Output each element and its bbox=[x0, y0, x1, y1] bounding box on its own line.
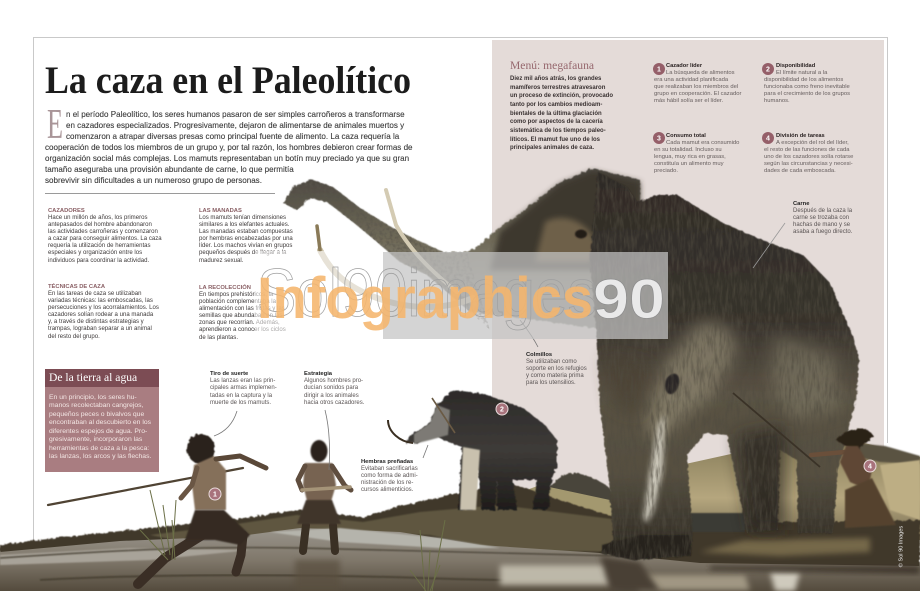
text: La recolección: de las plantas. bbox=[199, 335, 238, 341]
intro text: organización social más complejas. Los mamuts representaban un botín muy preciado ya que su gran bbox=[45, 154, 409, 162]
number markers: 2 bbox=[766, 66, 770, 74]
text: Cazadores: individuos para coordinar la actividad. bbox=[48, 258, 149, 264]
callout: Carne: carne se trozaba con bbox=[793, 215, 849, 221]
small mammoth bbox=[388, 390, 557, 510]
callout: Hembras preñadas: Hembras preñadas bbox=[361, 458, 413, 464]
item 1: Cazador líder: era una actividad planificada bbox=[654, 77, 728, 83]
hunter 1 bbox=[48, 434, 266, 584]
intro text: sobrevivir sin dificultades a un numeroso grupo de personas. bbox=[45, 176, 262, 184]
callout: Estrategia: Algunos hombres pro- bbox=[304, 378, 363, 384]
body text: encontraban al descubierto en los bbox=[49, 419, 151, 426]
callout: Tiro de suerte: tadas en la captura y la bbox=[210, 393, 272, 399]
text: Técnicas de caza: trampas, lograban separar a un animal bbox=[48, 326, 152, 332]
text: Técnicas de caza: persecuciones y los acorralamientos. Los bbox=[48, 305, 159, 311]
callout: Hembras preñadas bbox=[361, 458, 418, 493]
head shading bbox=[490, 171, 640, 270]
item 3: Consumo total: Consumo total bbox=[666, 132, 706, 138]
item 4: División de tareas: A excepción del rol del líder, bbox=[776, 140, 849, 146]
callout: Hembras preñadas: como forma de admi- bbox=[361, 473, 418, 479]
item 3: Consumo total: lengua, muy rica en grasas, bbox=[654, 154, 726, 160]
item 2: Disponibilidad: funcionaba como freno inevitable bbox=[764, 84, 850, 90]
callout: Tiro de suerte: Las lanzas eran las prin- bbox=[210, 378, 275, 384]
callout: Carne: Carne bbox=[793, 200, 809, 206]
credit: © Sol 90 Images bbox=[898, 526, 904, 567]
callout: Colmillos: soporte en los refugios bbox=[526, 366, 587, 372]
item 3: Consumo total: Cada mamut era consumido bbox=[666, 140, 739, 146]
text: La recolección: semillas que abundaban en las bbox=[199, 313, 282, 319]
text: Cazadores: CAZADORES bbox=[48, 208, 85, 214]
intro text: tamaño aseguraba una provisión abundante de carne, lo que permitía bbox=[45, 164, 294, 174]
text: Menú body: tanto por los cambios medioam- bbox=[510, 102, 602, 108]
item 2: Disponibilidad: Disponibilidad bbox=[776, 62, 815, 68]
item 1: Cazador líder: más hábil solía ser el líder. bbox=[654, 98, 723, 104]
text: Menú body bbox=[510, 76, 613, 151]
item 1: Cazador líder: La búsqueda de alimentos bbox=[666, 70, 735, 76]
text: Menú body: mamíferos terrestres atravesaron bbox=[510, 85, 605, 91]
text: Menú body: principales animales de caza. bbox=[510, 145, 594, 151]
intro text: en cazadores especializados. Progresivamente, dejaron de alimentarse de animales muertos y bbox=[66, 120, 404, 130]
landscape: left bank bbox=[0, 483, 920, 591]
trunk and head bbox=[283, 168, 640, 330]
text: Las manadas: por hembras encabezadas por una bbox=[199, 236, 293, 242]
intro text: n el período Paleolítico, los seres humanos pasaron de ser simples carroñeros a transformarse bbox=[66, 110, 405, 118]
grass bbox=[140, 490, 445, 591]
heading: Menú megafauna: Menú: megafauna bbox=[510, 59, 594, 72]
item 3: Consumo total: en su totalidad. Incluso su bbox=[654, 147, 722, 153]
divider rule bbox=[45, 192, 275, 194]
text: Las manadas: LAS MANADAS bbox=[199, 208, 242, 214]
callout: Carne bbox=[793, 200, 852, 235]
callout: Colmillos: y como materia prima bbox=[526, 373, 584, 379]
body text: herramientas de caza a la pesca: bbox=[49, 445, 149, 452]
item 2: Disponibilidad: El límite natural a la bbox=[776, 70, 827, 76]
text: Técnicas de caza: variadas técnicas: las emboscadas, las bbox=[48, 298, 153, 304]
body text: pequeños peces o bivalvos que bbox=[49, 411, 144, 418]
watermark: Sol90images bbox=[257, 255, 597, 331]
text: La recolección: población complementaba la bbox=[199, 299, 276, 305]
trunk wrinkles bbox=[283, 179, 490, 330]
heading bar bbox=[45, 369, 159, 387]
text: Cazadores: antepasados del hombre abandonaron bbox=[48, 222, 152, 228]
landscape: hills bbox=[500, 442, 920, 540]
text: Menú body: líticos. El mamut fue uno de los bbox=[510, 137, 600, 143]
body text: gresivamente, incorporaron las bbox=[49, 436, 142, 443]
number markers: 4 bbox=[868, 464, 872, 470]
text: Cazadores: a cazar para conseguir alimentos. La caza bbox=[48, 236, 162, 242]
number markers: 2 bbox=[500, 406, 504, 414]
item 4: División de tareas bbox=[764, 132, 854, 174]
callout: Tiro de suerte: Tiro de suerte bbox=[210, 371, 248, 377]
callout: Tiro de suerte: cipales armas implemen- bbox=[210, 385, 277, 391]
callout: Colmillos: Colmillos bbox=[526, 352, 552, 358]
watermark: 90 bbox=[593, 267, 665, 330]
callout: Carne: hachas de mano y se bbox=[793, 222, 850, 228]
fur texture bbox=[590, 172, 859, 560]
watermark: Infographics bbox=[257, 266, 593, 331]
item 3: Consumo total bbox=[654, 132, 740, 174]
text: Las manadas bbox=[199, 208, 293, 264]
body text bbox=[49, 394, 151, 460]
text: Menú body: sistemática de los tiempos paleo- bbox=[510, 128, 606, 134]
callout: Hembras preñadas: nistración de los re- bbox=[361, 480, 413, 486]
callout: Estrategia bbox=[304, 371, 364, 406]
text: Técnicas de caza bbox=[48, 283, 159, 340]
item 1: Cazador líder bbox=[654, 62, 742, 104]
callout: Tiro de suerte bbox=[210, 371, 277, 406]
text: Menú body: Diez mil años atrás, los grandes bbox=[510, 76, 601, 82]
callout: Colmillos: Se utilizaban como bbox=[526, 359, 577, 365]
text: Las manadas: Las manadas estaban compuestas bbox=[199, 229, 293, 235]
text: La recolección bbox=[199, 284, 286, 341]
text: Menú body: un proceso de extinción, provocado bbox=[510, 93, 613, 99]
item 1: Cazador líder: Cazador líder bbox=[666, 62, 702, 68]
hunter 3 bbox=[733, 393, 896, 528]
callout: Carne: Después de la caza la bbox=[793, 208, 852, 214]
callout: Estrategia: ducían sonidos para bbox=[304, 385, 358, 391]
text: Técnicas de caza: del resto del grupo. bbox=[48, 334, 100, 340]
body text: manos recolectaban cangrejos, bbox=[49, 402, 143, 409]
hunter 2 bbox=[297, 440, 351, 551]
number markers: 1 bbox=[657, 66, 661, 74]
panel: megafauna background bbox=[492, 40, 884, 490]
callout: Colmillos bbox=[526, 352, 587, 386]
item 3: Consumo total: constituía un alimento muy bbox=[654, 161, 724, 167]
callout: Estrategia: dirigir a los animales bbox=[304, 393, 359, 399]
text: Técnicas de caza: cazadores solían rodear a una manada bbox=[48, 312, 153, 318]
body text: las lanzas, los arcos y las flechas. bbox=[49, 453, 151, 460]
item 1: Cazador líder: grupo en cooperación. El cazador bbox=[654, 91, 741, 97]
item 3: Consumo total: preciado. bbox=[654, 168, 678, 174]
main mammoth bbox=[283, 168, 859, 560]
heading bar: De la tierra al agua bbox=[49, 371, 137, 384]
drop cap: E bbox=[47, 102, 63, 148]
intro text: cooperación de todos los miembros de un grupo y, por tal razón, los hombres debieron crear formas de bbox=[45, 142, 413, 152]
text: La recolección: En tiempos prehistóricos, la bbox=[199, 292, 273, 298]
text: Cazadores: requería la utilización de herramientas bbox=[48, 243, 151, 249]
callout: Hembras preñadas: cursos alimenticios. bbox=[361, 487, 413, 493]
callout: Colmillos: para los utensilios. bbox=[526, 380, 576, 386]
body text: diferentes espejos de agua. Pro- bbox=[49, 428, 147, 435]
text: La recolección: LA RECOLECCIÓN bbox=[199, 284, 251, 290]
callout: Carne: asaba a fuego directo. bbox=[793, 229, 852, 235]
text: Cazadores: Hace un millón de años, los primeros bbox=[48, 215, 147, 221]
text: Las manadas: madurez sexual. bbox=[199, 258, 243, 264]
title: La caza en el Paleolítico bbox=[45, 59, 411, 102]
intro text: comenzaron a atrapar diversas presas como principal fuente de alimento. La caza requería la bbox=[66, 132, 399, 140]
text: Cazadores bbox=[48, 208, 162, 264]
body bbox=[590, 172, 859, 560]
callout: Estrategia: hacia otros cazadores. bbox=[304, 400, 364, 406]
text: La recolección: zonas que recorrían. Además, bbox=[199, 320, 280, 326]
text: Cazadores: especiales y organización entre los bbox=[48, 250, 142, 256]
item 4: División de tareas: dades de cada emboscada. bbox=[764, 168, 836, 174]
number markers: 1 bbox=[213, 492, 217, 498]
text: Las manadas: pequeños después de llegar a la bbox=[199, 250, 286, 256]
item 2: Disponibilidad: para el crecimiento de los grupos bbox=[764, 91, 850, 97]
text: Cazadores: las actividades carroñeras y comenzaron bbox=[48, 229, 158, 235]
number markers: 4 bbox=[766, 136, 770, 142]
item 4: División de tareas: según las circunstancias y necesi- bbox=[764, 161, 853, 167]
text: Menú body: como por aspectos de la cacería bbox=[510, 119, 603, 125]
tusks bbox=[317, 190, 473, 307]
item 4: División de tareas: el resto de las funciones de cada bbox=[764, 147, 849, 153]
number markers: 3 bbox=[657, 136, 661, 142]
item 2: Disponibilidad: humanos. bbox=[764, 98, 790, 104]
callout: Tiro de suerte: muerte de los mamuts. bbox=[210, 400, 271, 406]
text: Las manadas: Los mamuts tenían dimensiones bbox=[199, 215, 286, 221]
item 2: Disponibilidad bbox=[764, 62, 850, 104]
text: Técnicas de caza: y, a través de distintas estrategias y bbox=[48, 319, 144, 325]
callout: Estrategia: Estrategia bbox=[304, 371, 332, 377]
item 2: Disponibilidad: disponibilidad de los alimentos bbox=[764, 77, 843, 83]
eye bbox=[575, 230, 587, 238]
item 4: División de tareas: División de tareas bbox=[776, 132, 825, 138]
text: Menú body: bientales de la última glaciación bbox=[510, 111, 602, 117]
text: La recolección: alimentación con las frutas y las bbox=[199, 306, 285, 312]
body text: En un principio, los seres hu- bbox=[49, 394, 137, 400]
intro text bbox=[45, 110, 413, 184]
landscape: water bbox=[0, 528, 920, 591]
panel: De la tierra al agua bbox=[45, 369, 159, 472]
text: Las manadas: similares a los elefantes actuales. bbox=[199, 222, 289, 228]
item 1: Cazador líder: que realizaban los miembros del bbox=[654, 84, 738, 90]
text: Técnicas de caza: En las tareas de caza se utilizaban bbox=[48, 291, 141, 297]
text: La recolección: aprendieron a conocer los ciclos bbox=[199, 327, 286, 333]
text: Las manadas: líder. Los machos vivían en grupos bbox=[199, 243, 292, 249]
callout: Hembras preñadas: Evitaban sacrificarlas bbox=[361, 466, 418, 472]
body highlights bbox=[645, 322, 736, 445]
text: Técnicas de caza: TÉCNICAS DE CAZA bbox=[48, 284, 105, 290]
item 4: División de tareas: uno de los cazadores solía rotarse bbox=[764, 154, 853, 160]
